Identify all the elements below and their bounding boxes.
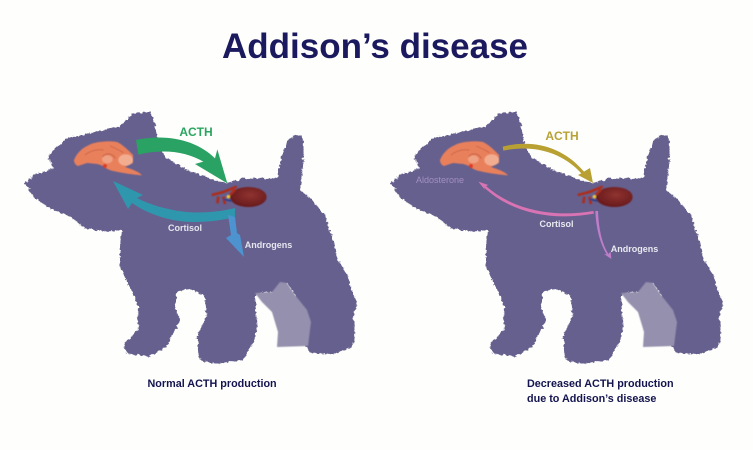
label: aldosterone: Aldosterone (416, 175, 464, 185)
arrow: androgens blue (226, 215, 244, 257)
caption: due to Addison's: due to Addison’s disease (527, 393, 656, 405)
dog silhouette: Addison's (391, 112, 723, 364)
arrow: ACTH green (136, 137, 227, 183)
label: androgens: Androgens (245, 240, 292, 250)
arrow: cortisol pink (478, 182, 594, 216)
label: cortisol: Cortisol (168, 223, 202, 233)
icon: adrenal gland (578, 187, 633, 207)
label: cortisol: Cortisol (539, 219, 574, 229)
arrow: androgens lilac (595, 211, 611, 259)
icon: brain (440, 141, 508, 175)
caption: decreased: Decreased ACTH production (527, 378, 674, 390)
dog silhouette: normal (25, 112, 357, 364)
caption: normal: Normal ACTH production (148, 378, 277, 390)
icon: brain (74, 141, 142, 175)
title: Addison’s disease (222, 27, 528, 66)
arrow: cortisol teal (113, 181, 235, 222)
panel: normal ACTH production (25, 112, 357, 390)
icon: adrenal gland (212, 187, 267, 207)
panel: decreased ACTH production (391, 112, 723, 405)
label: androgens: Androgens (611, 244, 658, 254)
label: ACTH: ACTH (545, 129, 579, 143)
arrow: ACTH gold (503, 144, 593, 183)
label: ACTH: ACTH (179, 125, 213, 139)
